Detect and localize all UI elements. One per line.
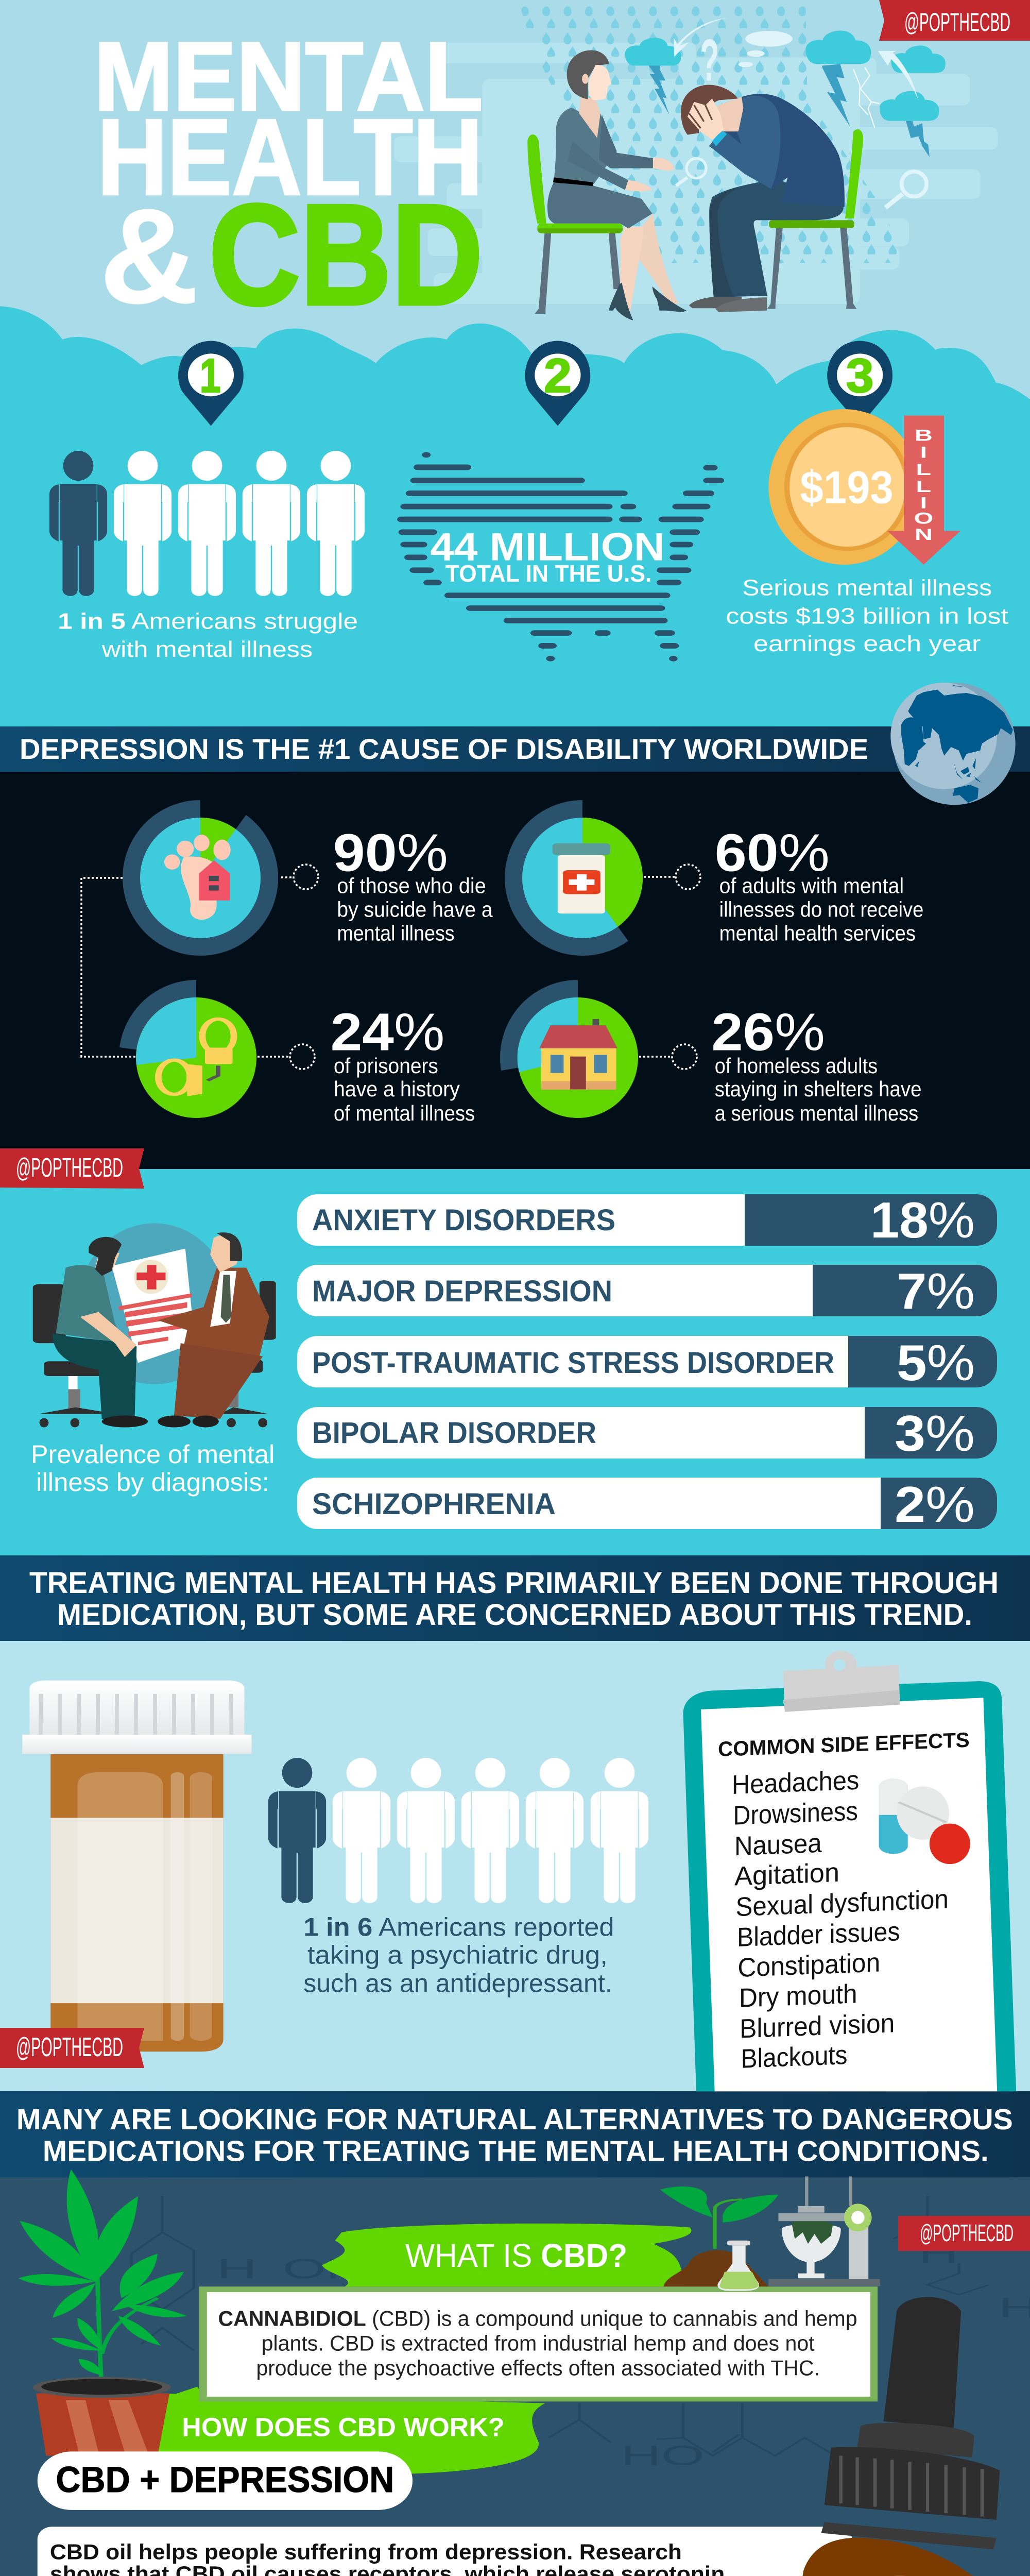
stat 2: 44 million: TOTAL IN THE U.S.	[445, 560, 651, 587]
stat: 24%: 24%	[331, 1002, 445, 1062]
thought marks and arrows	[674, 18, 918, 127]
gold coin $193: $193	[800, 462, 894, 513]
medication section	[0, 1651, 1030, 2177]
billion arrow	[887, 416, 960, 565]
caption: 1 in 6: such as an antidepressant.	[303, 1969, 612, 1997]
billion arrow: B	[915, 426, 933, 444]
stat: 24%	[331, 1002, 475, 1126]
bar: anxiety disorders 18%: 18%	[870, 1192, 975, 1248]
caption: prevalence	[31, 1440, 274, 1497]
billion arrow: L	[916, 460, 931, 479]
CBD dropper bottle	[774, 2297, 1007, 2576]
potted plant	[19, 2169, 187, 2456]
gold coin $193	[768, 409, 920, 565]
icon: medicine bottle	[553, 843, 610, 913]
section: hero background	[0, 0, 1030, 726]
green blob: what is CBD	[322, 2224, 691, 2286]
US map made of bars	[401, 455, 720, 658]
section: teal stats background	[0, 422, 1030, 726]
caption: prevalence: illness by diagnosis:	[36, 1468, 269, 1497]
text box: CBD depression	[38, 2527, 852, 2576]
list: common side effects: Drowsiness	[733, 1796, 858, 1831]
pin 2	[525, 341, 590, 426]
stat 2: 44 million	[430, 524, 665, 587]
heading: CBD + depression: CBD + DEPRESSION	[56, 2460, 394, 2500]
doctor and patient illustration	[33, 1223, 276, 1427]
lab equipment and sprout	[660, 2176, 880, 2291]
what is CBD section	[19, 2169, 1030, 2576]
stats cloud and captions	[0, 306, 1030, 662]
stat: 24%: of prisoners	[334, 1054, 438, 1078]
list: common side effects: Headaches	[732, 1765, 859, 1800]
bar: major depression 7%	[297, 1263, 997, 1319]
section: prevalence panel	[0, 1169, 1030, 1555]
caption: prevalence: Prevalence of mental	[31, 1440, 274, 1469]
title: MENTAL HEALTH & CBD: CBD	[209, 175, 483, 335]
molecule background: HO	[621, 2440, 705, 2471]
list: common side effects: Agitation	[734, 1858, 839, 1891]
depression stats: of mental illness	[334, 1101, 475, 1126]
banner: treating mental health: TREATING MENTAL HEALTH HAS PRIMARILY BEEN DONE THROUGH	[29, 1566, 999, 1600]
badge: left 2: @POPTHECBD	[16, 2032, 123, 2062]
stat: 60%: 60%	[715, 823, 830, 882]
billion arrow: O	[914, 509, 933, 527]
bar: major depression 7%: MAJOR DEPRESSION	[312, 1275, 612, 1308]
clipboard	[683, 1651, 1016, 2092]
stat 1 caption	[58, 608, 358, 662]
stat: 24%: have a history	[334, 1077, 460, 1101]
stat: 90%	[333, 823, 493, 945]
hero illustration	[527, 18, 946, 320]
title: MENTAL HEALTH & CBD: &	[100, 181, 198, 331]
bar: PTSD 5%: POST-TRAUMATIC STRESS DISORDER	[312, 1346, 834, 1380]
pin 3: 3	[846, 349, 873, 402]
stat 1 caption: with mental illness	[101, 637, 313, 662]
list: common side effects: Nausea	[734, 1828, 822, 1861]
icon: footprint with tag	[164, 835, 231, 920]
bar: bipolar disorder 3%: 3%	[895, 1405, 975, 1462]
billion arrow: N	[915, 525, 933, 544]
depression stats: of those who die	[337, 874, 486, 898]
prevalence illustration and caption	[31, 1223, 276, 1497]
stat: 26%	[711, 1002, 922, 1126]
section: medication panel	[0, 1641, 1030, 2091]
icon: pills	[879, 1779, 970, 1864]
title: MENTAL HEALTH & CBD: HEALTH	[97, 97, 483, 217]
billion arrow: I	[920, 494, 927, 512]
green blob: what is CBD: WHAT IS CBD?	[405, 2238, 627, 2274]
billion arrow: L	[916, 477, 931, 496]
badge: right middle	[898, 2216, 1030, 2251]
hero backdrop bars and rain	[394, 7, 998, 304]
text box: cannabidiol	[199, 2286, 878, 2401]
caption: 1 in 6: 1 in 6 Americans reported	[303, 1912, 614, 1942]
banner: depression	[0, 726, 1030, 772]
molecule background: OH	[282, 2253, 366, 2284]
icon: globe	[890, 683, 1016, 805]
pin 1	[178, 341, 244, 426]
molecule background: H	[217, 2253, 257, 2284]
bar: schizophrenia 2%: 2%	[895, 1476, 975, 1533]
pin 2: 2	[544, 349, 572, 402]
magnifying glasses	[676, 158, 926, 208]
banner: natural alternatives	[0, 2091, 1030, 2177]
people row: 1 in 6	[268, 1758, 648, 1903]
donut: 90%	[123, 800, 278, 956]
storm clouds and lightning	[625, 30, 946, 157]
bar: PTSD 5%	[297, 1334, 997, 1391]
banner: treating mental health	[0, 1555, 1030, 1641]
icon: house	[539, 1019, 617, 1090]
title: MENTAL HEALTH & CBD: MENTAL	[94, 22, 483, 131]
bar: schizophrenia 2%	[297, 1476, 997, 1533]
title: MENTAL HEALTH & CBD	[94, 22, 483, 335]
stat: 90%: mental illness	[337, 921, 455, 945]
section: CBD slate panel	[0, 2177, 1030, 2576]
depression stats	[158, 823, 923, 1126]
cloud divider	[0, 306, 1030, 427]
bar: schizophrenia 2%: SCHIZOPHRENIA	[312, 1487, 556, 1521]
stat: 26%: 26%	[711, 1002, 825, 1062]
caption: 1 in 6: taking a psychiatric drug,	[307, 1940, 608, 1970]
molecule background: H	[918, 2238, 958, 2269]
pin 3	[827, 341, 892, 426]
billion arrow: I	[920, 443, 927, 462]
badge: left 1	[0, 1148, 144, 1189]
pill bottle	[22, 1681, 252, 2052]
badge: left 2	[0, 2028, 144, 2068]
man in chair	[681, 85, 863, 312]
stat 2: 44 million: 44 MILLION	[430, 524, 665, 569]
heading: CBD + depression	[38, 2451, 413, 2510]
bar: bipolar disorder 3%	[297, 1405, 997, 1462]
bar: anxiety disorders 18%: ANXIETY DISORDERS	[312, 1204, 615, 1237]
thought marks and arrows: ?	[700, 27, 719, 93]
list: common side effects: Constipation	[737, 1947, 880, 1983]
molecule background	[131, 2196, 1030, 2471]
bar: anxiety disorders 18%	[297, 1192, 997, 1248]
banner: treating mental health: MEDICATION, BUT SOME ARE CONCERNED ABOUT THIS TREND.	[57, 1598, 972, 1632]
banner: depression: DEPRESSION IS THE #1 CAUSE OF DISABILITY WORLDWIDE	[20, 733, 868, 765]
list: common side effects: Blackouts	[741, 2040, 847, 2074]
badge: top right	[879, 0, 1030, 41]
list: common side effects: Dry mouth	[739, 1979, 857, 2013]
stat: 90%: 90%	[333, 823, 448, 882]
section: depression dark panel	[0, 772, 1030, 1169]
bar: major depression 7%: 7%	[897, 1263, 975, 1319]
stat: 60%	[715, 823, 923, 945]
list: common side effects: Blurred vision	[740, 2008, 895, 2044]
stat 3 caption	[726, 575, 1008, 656]
list: common side effects	[718, 1728, 970, 2074]
depression stats: by suicide have a	[337, 897, 493, 922]
pin 1: 1	[200, 349, 221, 402]
icon: handcuffs	[158, 1019, 234, 1096]
badge: left 1: @POPTHECBD	[16, 1153, 123, 1183]
bar: PTSD 5%: 5%	[897, 1334, 975, 1391]
woman in chair	[527, 50, 686, 320]
green blob: how does CBD work: HOW DOES CBD WORK?	[182, 2413, 505, 2442]
donut: 60%	[505, 800, 643, 956]
caption: 1 in 6	[303, 1912, 614, 1997]
stat 1 caption: 1 in 5 Americans struggle	[58, 608, 358, 634]
bar: bipolar disorder 3%: BIPOLAR DISORDER	[312, 1416, 596, 1450]
donut: 24%	[119, 980, 256, 1118]
people row: 1 in 5	[49, 451, 365, 596]
green blob: how does CBD work	[158, 2387, 545, 2474]
donut: 26%	[500, 980, 638, 1118]
connector: dotted lines	[81, 865, 700, 1069]
